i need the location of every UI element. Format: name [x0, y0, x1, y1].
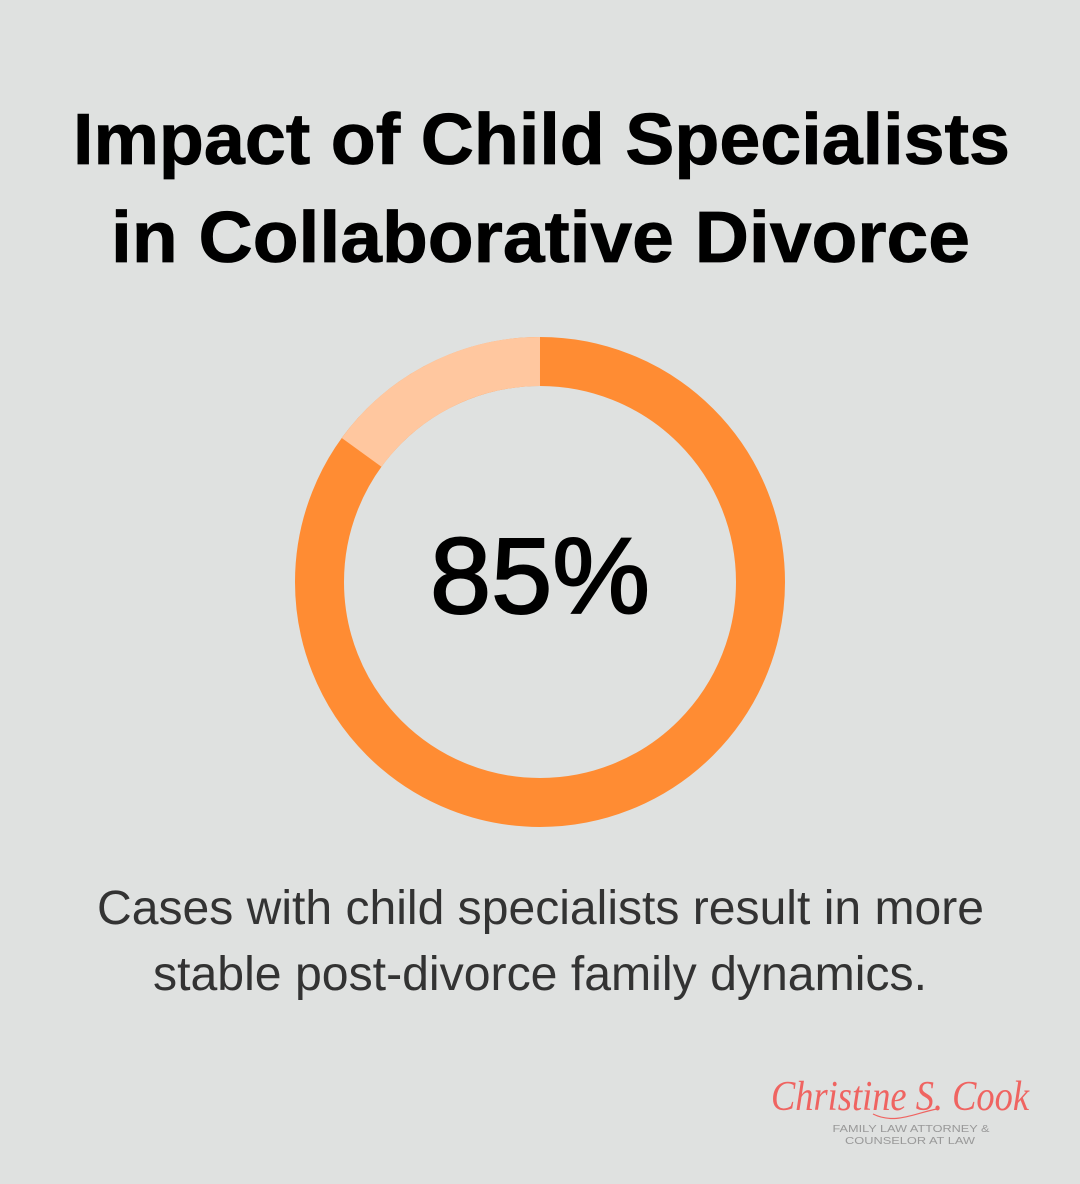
- description text: Cases with child specialists result in more: [97, 882, 984, 935]
- title: Impact of Child Specialists: [73, 100, 1010, 180]
- title: in Collaborative Divorce: [111, 198, 970, 278]
- donut value: 85%: 85%: [430, 515, 650, 636]
- description text: stable post-divorce family dynamics.: [153, 948, 927, 1001]
- title: [73, 100, 1010, 278]
- description text: [97, 882, 984, 1001]
- logo: Christine S. Cook: FAMILY LAW ATTORNEY &: [832, 1123, 990, 1135]
- logo: Christine S. Cook: COUNSELOR AT LAW: [845, 1135, 975, 1147]
- logo: Christine S. Cook: [771, 1074, 1030, 1147]
- donut chart: 85%: [320, 362, 760, 802]
- logo: Christine S. Cook: Christine S. Cook: [771, 1074, 1030, 1120]
